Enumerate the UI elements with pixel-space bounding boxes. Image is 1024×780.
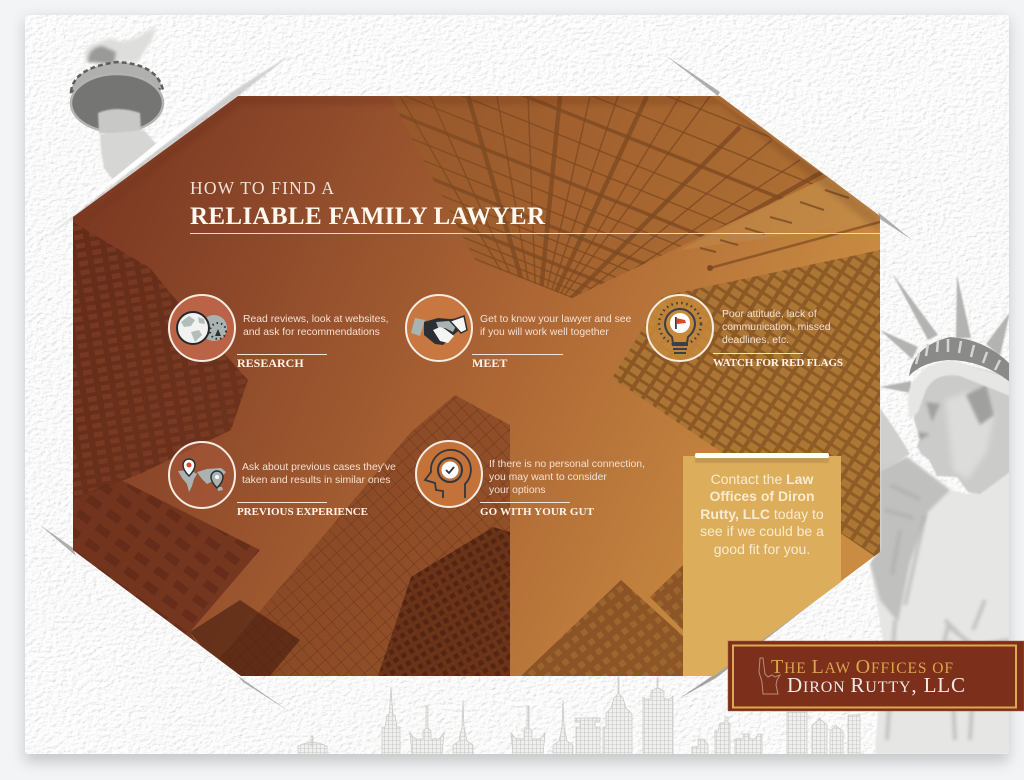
step: previous experience — [169, 442, 396, 518]
flame — [85, 26, 156, 62]
main panel — [73, 96, 880, 676]
step: watch for red flags: Poor attitude, lack of — [722, 309, 817, 320]
logo plate: THE LAW OFFICES OF — [771, 656, 953, 678]
hand — [100, 130, 158, 180]
logo plate: DIRON RUTTY, LLC — [787, 673, 965, 697]
robes — [870, 457, 1010, 754]
step: meet — [406, 295, 632, 370]
step: previous experience: Ask about previous cases they've — [242, 462, 396, 473]
icon: small statue — [759, 658, 780, 694]
logo plate — [728, 641, 1024, 711]
step: meet: if you will work well together — [480, 327, 609, 338]
icon: globe and light — [169, 295, 235, 361]
stem — [98, 109, 141, 135]
step: previous experience: taken and results in similar ones — [242, 475, 390, 486]
step: previous experience: PREVIOUS EXPERIENCE — [237, 506, 368, 518]
callout: contact note: Rutty, LLC today to — [700, 506, 824, 522]
crown band — [909, 337, 1010, 382]
step: go with your gut: GO WITH YOUR GUT — [480, 506, 595, 518]
callout: contact note — [683, 453, 841, 676]
railing — [71, 62, 163, 92]
step: research: and ask for recommendations — [243, 327, 380, 338]
building: centre lower — [378, 527, 510, 676]
step: watch for red flags: communication, missed — [722, 322, 831, 333]
step: go with your gut: you may want to consider — [489, 472, 607, 483]
skyline illustration — [298, 677, 860, 755]
step: go with your gut: your options — [489, 485, 546, 496]
raised arm — [880, 408, 910, 472]
step: research: RESEARCH — [237, 356, 304, 370]
building: lower left — [73, 478, 260, 642]
step: research: Read reviews, look at websites, — [243, 314, 389, 325]
step: watch for red flags: WATCH FOR RED FLAGS — [713, 357, 843, 369]
neck and face — [913, 362, 1010, 494]
callout: contact note: Offices of Diron — [709, 488, 815, 504]
title — [190, 178, 880, 234]
icon: light bulb with flag — [647, 295, 713, 361]
step: watch for red flags — [647, 295, 843, 369]
step: research — [169, 295, 389, 370]
icon: head with check mark — [416, 441, 482, 507]
crown spikes — [880, 273, 1010, 393]
folded paper flaps — [36, 55, 912, 712]
callout: contact note: see if we could be a — [700, 523, 824, 539]
building: base shadow — [190, 600, 300, 676]
title: HOW TO FIND A — [190, 178, 334, 198]
step: meet: MEET — [472, 356, 507, 370]
building: upper left — [73, 222, 248, 500]
building: top centre — [398, 96, 826, 298]
bowl — [71, 74, 163, 132]
callout: contact note: good fit for you. — [714, 541, 810, 557]
icon: handshake — [406, 295, 472, 361]
step: watch for red flags: deadlines, etc. — [722, 335, 789, 346]
statue of liberty: torch — [71, 26, 163, 180]
building: centre tower — [219, 395, 510, 676]
step: go with your gut — [416, 441, 645, 518]
step: go with your gut: If there is no personal connection, — [489, 459, 645, 470]
statue of liberty: head and robes — [870, 273, 1010, 754]
title: RELIABLE FAMILY LAWYER — [190, 203, 546, 230]
building: lower right — [521, 580, 683, 676]
icon: world map with pins — [169, 442, 235, 508]
step: meet: Get to know your lawyer and see — [480, 314, 632, 325]
callout: contact note: Contact the Law — [711, 471, 813, 487]
building: underside and antenna — [682, 189, 880, 271]
building: right tower — [612, 250, 880, 560]
